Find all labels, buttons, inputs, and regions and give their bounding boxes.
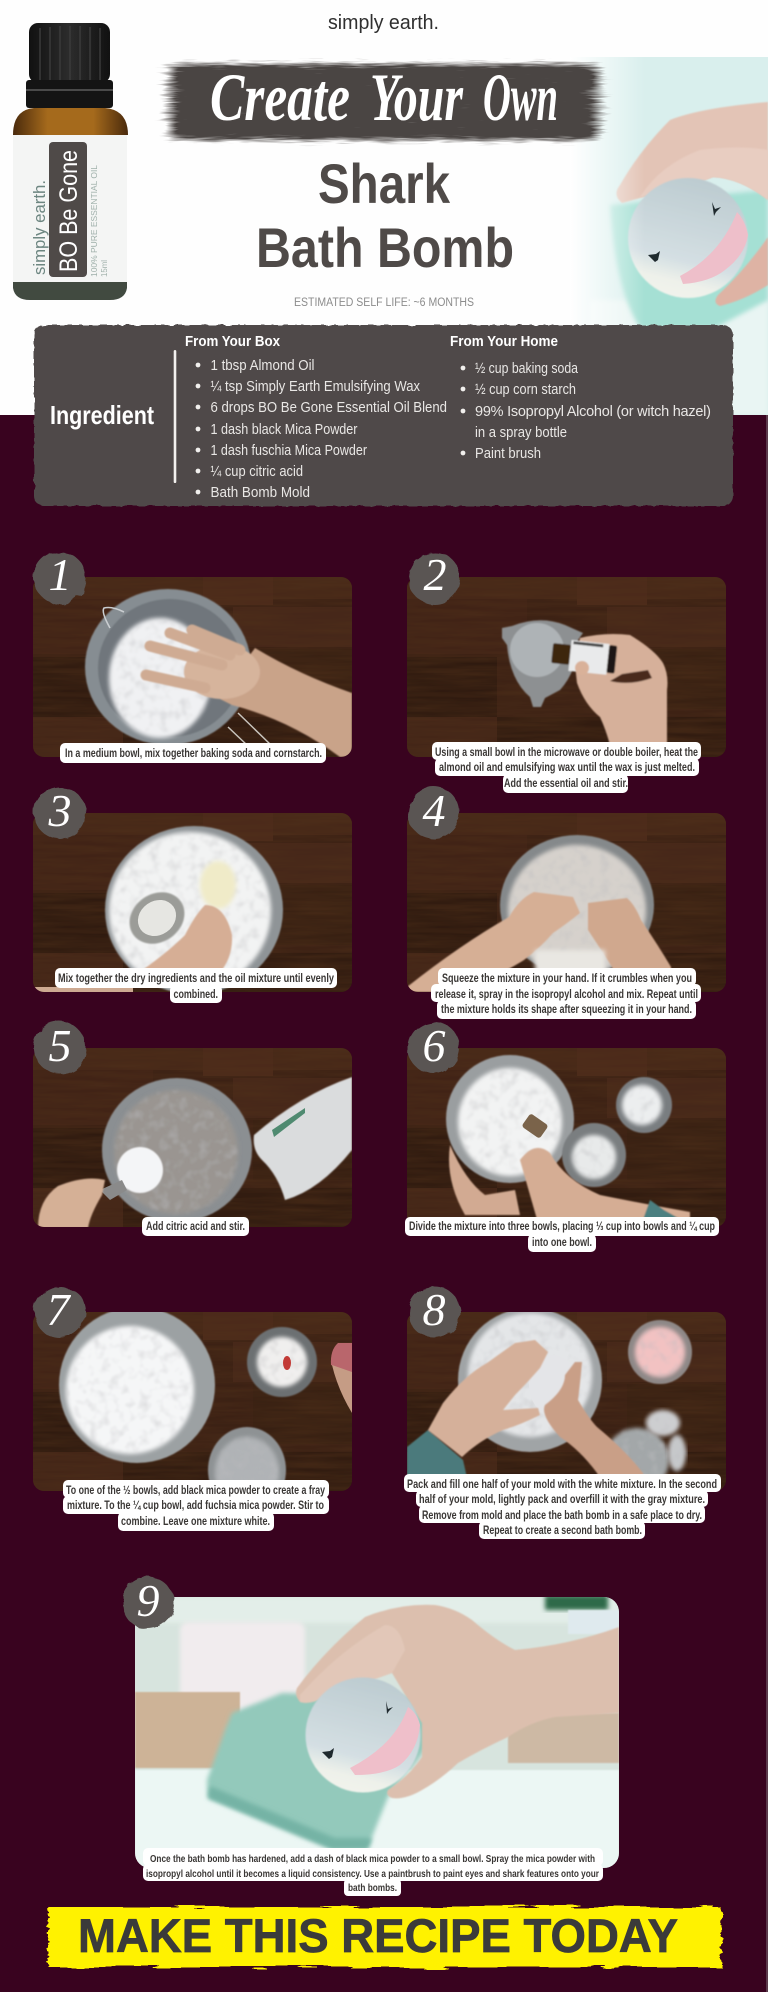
number badge 4: 4 bbox=[422, 785, 446, 836]
list: from your box: From Your Box bbox=[185, 334, 280, 350]
shelf life note: ESTIMATED SELF LIFE: ~6 MONTHS bbox=[294, 297, 474, 309]
number badge 9: 9 bbox=[136, 1575, 160, 1626]
number badge 8 bbox=[408, 1284, 460, 1338]
product bottle: BO Be Gone: 15ml bbox=[100, 260, 109, 277]
photo: dividing into three bowls bbox=[407, 1048, 726, 1230]
photo: mixing powder by hand bbox=[33, 577, 352, 757]
panel: ingredients bbox=[34, 325, 733, 506]
list: from your home: ½ cup baking soda bbox=[475, 361, 579, 377]
caption 4: Squeeze the mixture in your hand. If it crumbles when you bbox=[442, 973, 692, 985]
list: from your home: From Your Home bbox=[450, 334, 558, 350]
photo: packing the mold bbox=[407, 1308, 726, 1492]
caption 1: In a medium bowl, mix together baking soda and cornstarch. bbox=[65, 748, 322, 760]
caption 2 bbox=[432, 742, 701, 793]
step 7 bbox=[33, 1284, 352, 1531]
caption 6 bbox=[405, 1217, 719, 1252]
product bottle: BO Be Gone: BO Be Gone bbox=[55, 150, 83, 272]
step 6 bbox=[405, 1020, 726, 1252]
caption 4: the mixture holds its shape after squeezing it in your hand. bbox=[441, 1004, 692, 1016]
list: from your home bbox=[450, 334, 711, 462]
number badge 8: 8 bbox=[422, 1284, 446, 1335]
caption 3: combined. bbox=[174, 989, 218, 1001]
caption 1 bbox=[60, 743, 326, 763]
list: from your home: in a spray bottle bbox=[475, 425, 567, 441]
list: from your box bbox=[185, 334, 447, 501]
caption 8: half of your mold, lightly pack and overfill it with the gray mixture. bbox=[419, 1494, 705, 1506]
number badge 7: 7 bbox=[46, 1284, 72, 1335]
list: from your box: 1 dash fuschia Mica Powder bbox=[210, 443, 367, 459]
photo: adding mica powders bbox=[33, 1312, 352, 1491]
step 8 bbox=[404, 1284, 726, 1539]
photo: adding essential oil bbox=[407, 577, 726, 757]
number badge 2 bbox=[408, 549, 460, 604]
title banner: Create Your Own: Your bbox=[370, 59, 463, 135]
heading: Shark Bath Bomb: Bath Bomb bbox=[256, 216, 514, 279]
caption 9 bbox=[143, 1848, 603, 1896]
number badge 6: 6 bbox=[422, 1020, 446, 1071]
list: from your box: ¼ tsp Simply Earth Emulsifying Wax bbox=[210, 379, 421, 395]
caption 5 bbox=[142, 1217, 249, 1236]
caption 2: Using a small bowl in the microwave or double boiler, heat the bbox=[435, 747, 698, 759]
number badge 5 bbox=[34, 1020, 86, 1074]
title banner: Create Your Own bbox=[170, 59, 598, 140]
number badge 5: 5 bbox=[48, 1020, 72, 1071]
product bottle: BO Be Gone: 100% PURE ESSENTIAL OIL bbox=[90, 164, 99, 277]
photo: combining dry and oil mixture bbox=[33, 813, 352, 994]
number badge 1: 1 bbox=[48, 549, 72, 600]
caption 9: Once the bath bomb has hardened, add a dash of black mica powder to a small bowl. Spray the mica powder with bbox=[150, 1853, 595, 1865]
heading: Shark Bath Bomb: Shark bbox=[318, 152, 451, 215]
caption 6: into one bowl. bbox=[532, 1237, 592, 1249]
step 5 bbox=[33, 1020, 352, 1236]
caption 8 bbox=[404, 1474, 721, 1539]
caption 5: Add citric acid and stir. bbox=[146, 1221, 245, 1233]
caption 3 bbox=[55, 968, 337, 1003]
caption 4: release it, spray in the isopropyl alcohol and mix. Repeat until bbox=[435, 989, 698, 1001]
list: from your home: 99% Isopropyl Alcohol (or witch hazel) bbox=[475, 404, 711, 420]
step 3 bbox=[33, 785, 352, 1003]
title banner: Create Your Own: Own bbox=[483, 59, 558, 135]
label: Ingredient: Ingredient bbox=[50, 400, 154, 430]
step 4 bbox=[407, 785, 726, 1019]
photo: squeezing the mixture bbox=[407, 813, 726, 993]
caption 7 bbox=[63, 1480, 329, 1531]
list: from your box: 6 drops BO Be Gone Essential Oil Blend bbox=[210, 400, 447, 416]
list: from your box: 1 tbsp Almond Oil bbox=[210, 358, 314, 374]
list: from your box: ¼ cup citric acid bbox=[210, 464, 303, 480]
list: from your box: 1 dash black Mica Powder bbox=[210, 422, 358, 438]
number badge 7 bbox=[34, 1284, 86, 1338]
list: from your home: Paint brush bbox=[475, 446, 541, 462]
title banner: Create Your Own: Create bbox=[210, 59, 350, 135]
call to action banner: MAKE THIS RECIPE TODAY bbox=[78, 1909, 678, 1962]
photo: finished shark bath bomb bbox=[135, 1595, 619, 1868]
header photo: hand holding bath bomb bbox=[570, 57, 768, 415]
step 1 bbox=[33, 549, 352, 763]
caption 2: almond oil and emulsifying wax until the wax is just melted. bbox=[439, 762, 695, 774]
caption 7: To one of the ½ bowls, add black mica powder to create a fray bbox=[66, 1485, 325, 1497]
header white background bbox=[0, 0, 768, 415]
caption 4 bbox=[431, 968, 701, 1019]
caption 8: Repeat to create a second bath bomb. bbox=[483, 1525, 642, 1537]
product bottle: BO Be Gone: simply earth. bbox=[30, 180, 49, 275]
caption 7: mixture. To the ¼ cup bowl, add fuchsia mica powder. Stir to bbox=[67, 1500, 324, 1512]
step 2 bbox=[407, 549, 726, 793]
photo: adding citric acid bbox=[33, 1048, 352, 1228]
number badge 2: 2 bbox=[424, 549, 446, 600]
list: from your home: ½ cup corn starch bbox=[475, 382, 576, 398]
heading: Shark Bath Bomb bbox=[256, 152, 514, 279]
number badge 9 bbox=[122, 1575, 174, 1629]
caption 9: bath bombs. bbox=[348, 1882, 397, 1894]
number badge 3 bbox=[34, 785, 86, 839]
number badge 1 bbox=[34, 549, 86, 604]
step 9 bbox=[122, 1575, 619, 1896]
caption 2: Add the essential oil and stir. bbox=[504, 778, 628, 790]
number badge 6 bbox=[408, 1020, 460, 1074]
product bottle: BO Be Gone bbox=[13, 23, 128, 300]
caption 7: combine. Leave one mixture white. bbox=[121, 1516, 270, 1528]
caption 3: Mix together the dry ingredients and the oil mixture until evenly bbox=[58, 973, 334, 985]
logo: simply earth: simply earth. bbox=[328, 12, 439, 34]
caption 9: isopropyl alcohol until it becomes a liquid consistency. Use a paintbrush to paint eyes and shark features onto your bbox=[146, 1868, 599, 1880]
number badge 3: 3 bbox=[48, 785, 72, 836]
number badge 4 bbox=[408, 785, 460, 839]
list: from your box: Bath Bomb Mold bbox=[210, 485, 310, 501]
